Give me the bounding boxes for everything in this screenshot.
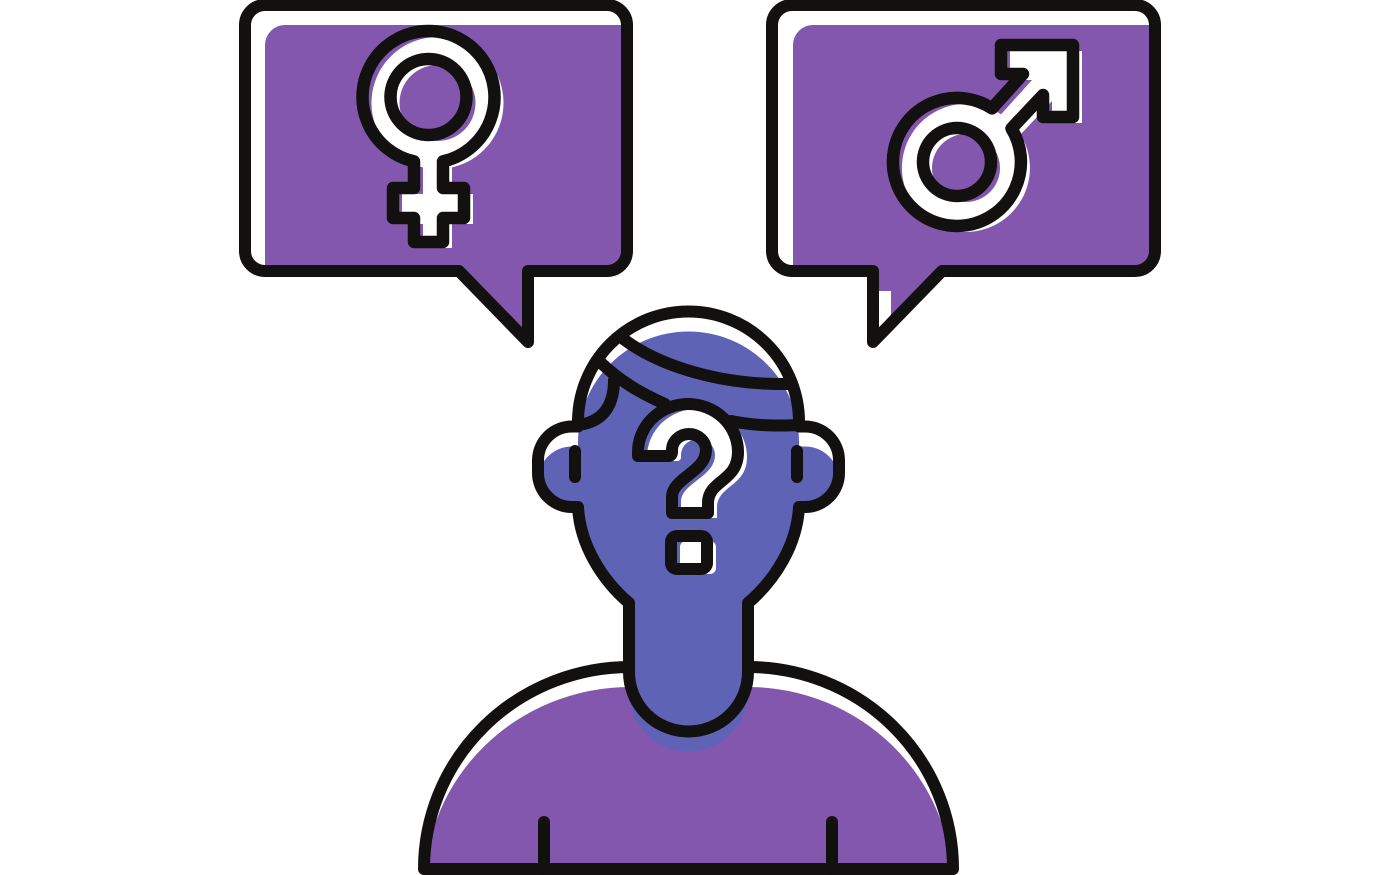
person: torso — [424, 667, 953, 875]
speech bubble: male — [772, 5, 1175, 362]
hair lines — [577, 338, 800, 426]
bubble fill: male — [793, 25, 1149, 315]
person: head — [538, 312, 839, 752]
icon: question mark — [638, 404, 747, 574]
icon: female symbol — [362, 31, 504, 248]
bubble outline: female — [245, 5, 627, 342]
bubble fill: female — [265, 25, 621, 328]
ear lines — [575, 451, 797, 477]
icon: male symbol — [893, 45, 1082, 232]
speech bubble: female — [245, 5, 647, 362]
bubble outline: male — [772, 5, 1155, 342]
